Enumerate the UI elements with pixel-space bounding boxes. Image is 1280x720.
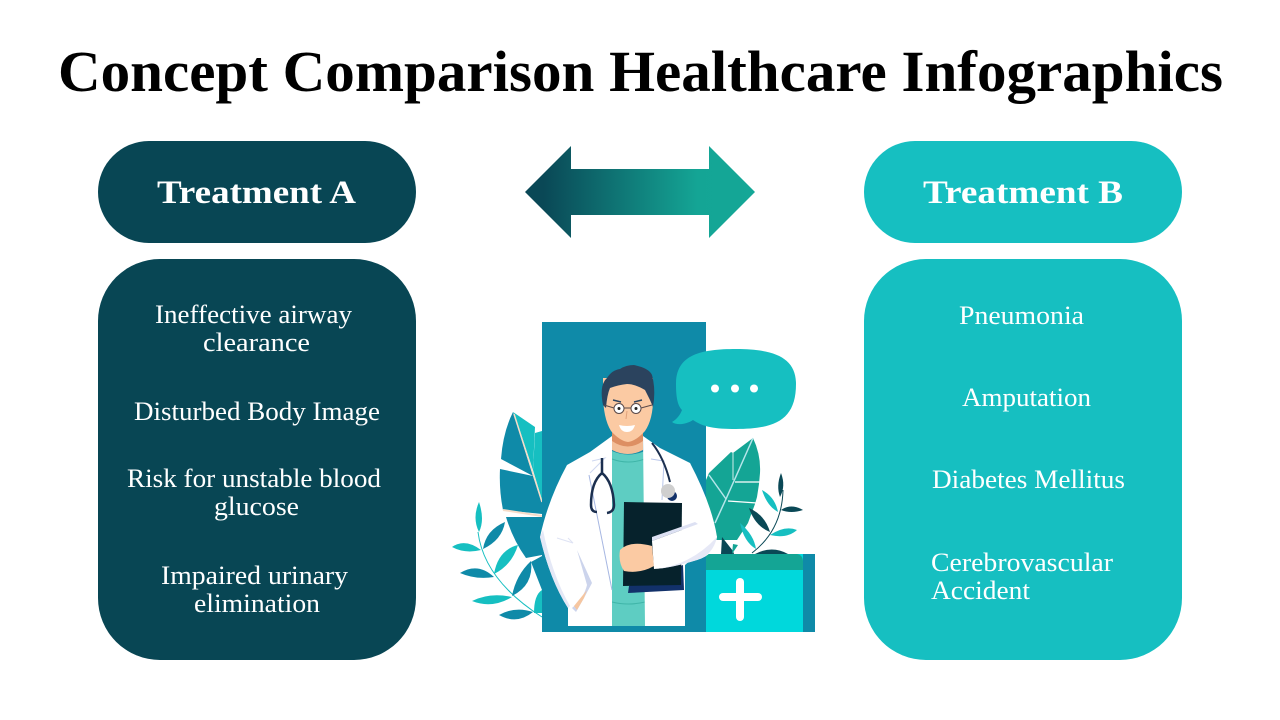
- icon: right plant small sprig: [721, 473, 803, 554]
- clipboard: [623, 502, 684, 593]
- arm and hand: [620, 463, 717, 572]
- illustration: doctor with plants and medical box: [452, 322, 815, 632]
- coat right: [643, 436, 717, 626]
- title: Concept Comparison Healthcare Infographics: [58, 39, 1223, 104]
- stethoscope: [591, 443, 677, 513]
- panel: Treatment A list: [98, 259, 416, 660]
- neck: [612, 425, 643, 454]
- text: Risk for unstable blood glucose: glucose: [214, 492, 299, 521]
- text: Amputation: Amputation: [962, 383, 1091, 412]
- text: Risk for unstable blood glucose: Risk for unstable blood: [127, 464, 381, 493]
- icon: right plant large leaf: [706, 438, 760, 546]
- text: Pneumonia: Pneumonia: [959, 301, 1084, 330]
- scrubs: [612, 451, 645, 626]
- head: [602, 365, 654, 442]
- icon: left plant large leaves: [500, 412, 542, 590]
- panel: blue backdrop: [542, 322, 706, 632]
- icon: doctor: [540, 365, 717, 626]
- heading: Treatment B: Treatment B: [923, 175, 1123, 211]
- text: Disturbed Body Image: Disturbed Body Image: [134, 397, 380, 426]
- panel: Treatment A header: [98, 141, 416, 243]
- text: Risk for unstable blood glucose: [127, 464, 381, 521]
- text: Diabetes Mellitus: Diabetes Mellitus: [932, 465, 1125, 494]
- icon: speech bubble: [672, 349, 796, 429]
- heading: Treatment A: Treatment A: [157, 175, 356, 211]
- text: Cerebrovascular Accident: [931, 548, 1113, 605]
- text: Ineffective airway clearance: clearance: [203, 328, 310, 357]
- panel: Treatment B header: [864, 141, 1182, 243]
- text: Impaired urinary elimination: Impaired urinary: [161, 561, 348, 590]
- text: Cerebrovascular Accident: Accident: [931, 576, 1031, 605]
- text: Impaired urinary elimination: elimination: [194, 589, 320, 618]
- panel: Treatment B list: [864, 259, 1182, 660]
- coat left: [540, 436, 612, 626]
- text: Ineffective airway clearance: [155, 300, 352, 357]
- text: Cerebrovascular Accident: Cerebrovascular: [931, 548, 1113, 577]
- text: Ineffective airway clearance: Ineffective airway: [155, 300, 352, 329]
- arrow: double-headed comparison: [525, 146, 755, 238]
- icon: left plant small sprig: [452, 502, 542, 619]
- text: Impaired urinary elimination: [161, 561, 348, 618]
- icon: medical box: [706, 554, 815, 632]
